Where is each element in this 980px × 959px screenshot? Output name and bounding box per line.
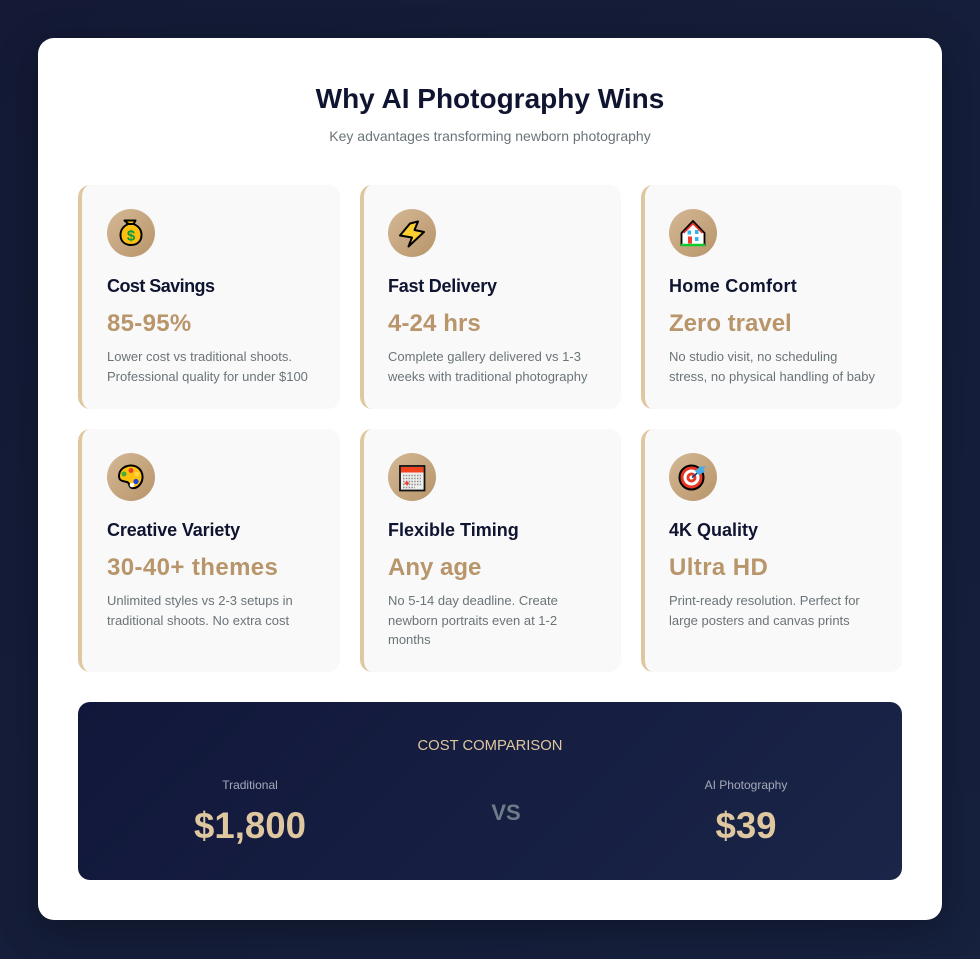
description: stress, no physical handling of baby (669, 368, 875, 384)
stat: Zero travel (669, 310, 792, 337)
icon: house (669, 209, 717, 257)
description (669, 349, 875, 384)
description: weeks with traditional photography (388, 368, 587, 384)
icon: palette (107, 453, 155, 501)
comparison heading: COST COMPARISON (418, 738, 562, 754)
label: AI photography: AI Photography (705, 778, 787, 792)
icon: calendar (388, 453, 436, 501)
heading: 4K Quality (669, 520, 758, 540)
panel: flexible timing (360, 429, 621, 672)
stat: 30-40+ themes (107, 554, 278, 581)
description (669, 593, 860, 628)
heading: Flexible Timing (388, 520, 519, 540)
description: months (388, 632, 431, 647)
icon: lightning (388, 209, 436, 257)
stat: Any age (388, 554, 481, 581)
description: Unlimited styles vs 2-3 setups in (107, 593, 293, 608)
heading: Home Comfort (669, 276, 797, 296)
description: Professional quality for under $100 (107, 368, 308, 384)
stat: 85-95% (107, 310, 192, 337)
heading: Cost Savings (107, 276, 214, 296)
description: newborn portraits even at 1-2 (388, 612, 557, 628)
label: traditional: Traditional (222, 778, 278, 792)
description: No 5-14 day deadline. Create (388, 593, 558, 608)
icon: target (669, 453, 717, 501)
icon: money bag: $ (127, 228, 136, 244)
icon: money bag (107, 209, 155, 257)
value: AI price: $39 (715, 805, 777, 846)
description (388, 593, 558, 647)
description: Lower cost vs traditional shoots. (107, 349, 292, 364)
description (388, 349, 588, 384)
stat: 4-24 hrs (388, 310, 481, 337)
title: Why AI Photography Wins (316, 83, 664, 114)
panel: cost savings (78, 185, 340, 409)
panel: creative variety (78, 429, 340, 672)
description (107, 349, 308, 384)
vs label: VS (491, 800, 521, 825)
stat: Ultra HD (669, 554, 768, 581)
description: traditional shoots. No extra cost (107, 612, 289, 628)
subtitle: Key advantages transforming newborn photography (329, 128, 651, 144)
value: traditional price: $1,800 (194, 805, 306, 846)
description: No studio visit, no scheduling (669, 349, 837, 364)
panel: 4K quality (641, 429, 902, 672)
panel: home comfort (641, 185, 902, 409)
description: large posters and canvas prints (669, 612, 850, 628)
panel: cost comparison (78, 702, 902, 880)
description: Complete gallery delivered vs 1-3 (388, 349, 581, 364)
heading: Fast Delivery (388, 276, 497, 296)
description (107, 593, 293, 628)
heading: Creative Variety (107, 520, 240, 540)
description: Print-ready resolution. Perfect for (669, 593, 860, 608)
panel: fast delivery (360, 185, 621, 409)
